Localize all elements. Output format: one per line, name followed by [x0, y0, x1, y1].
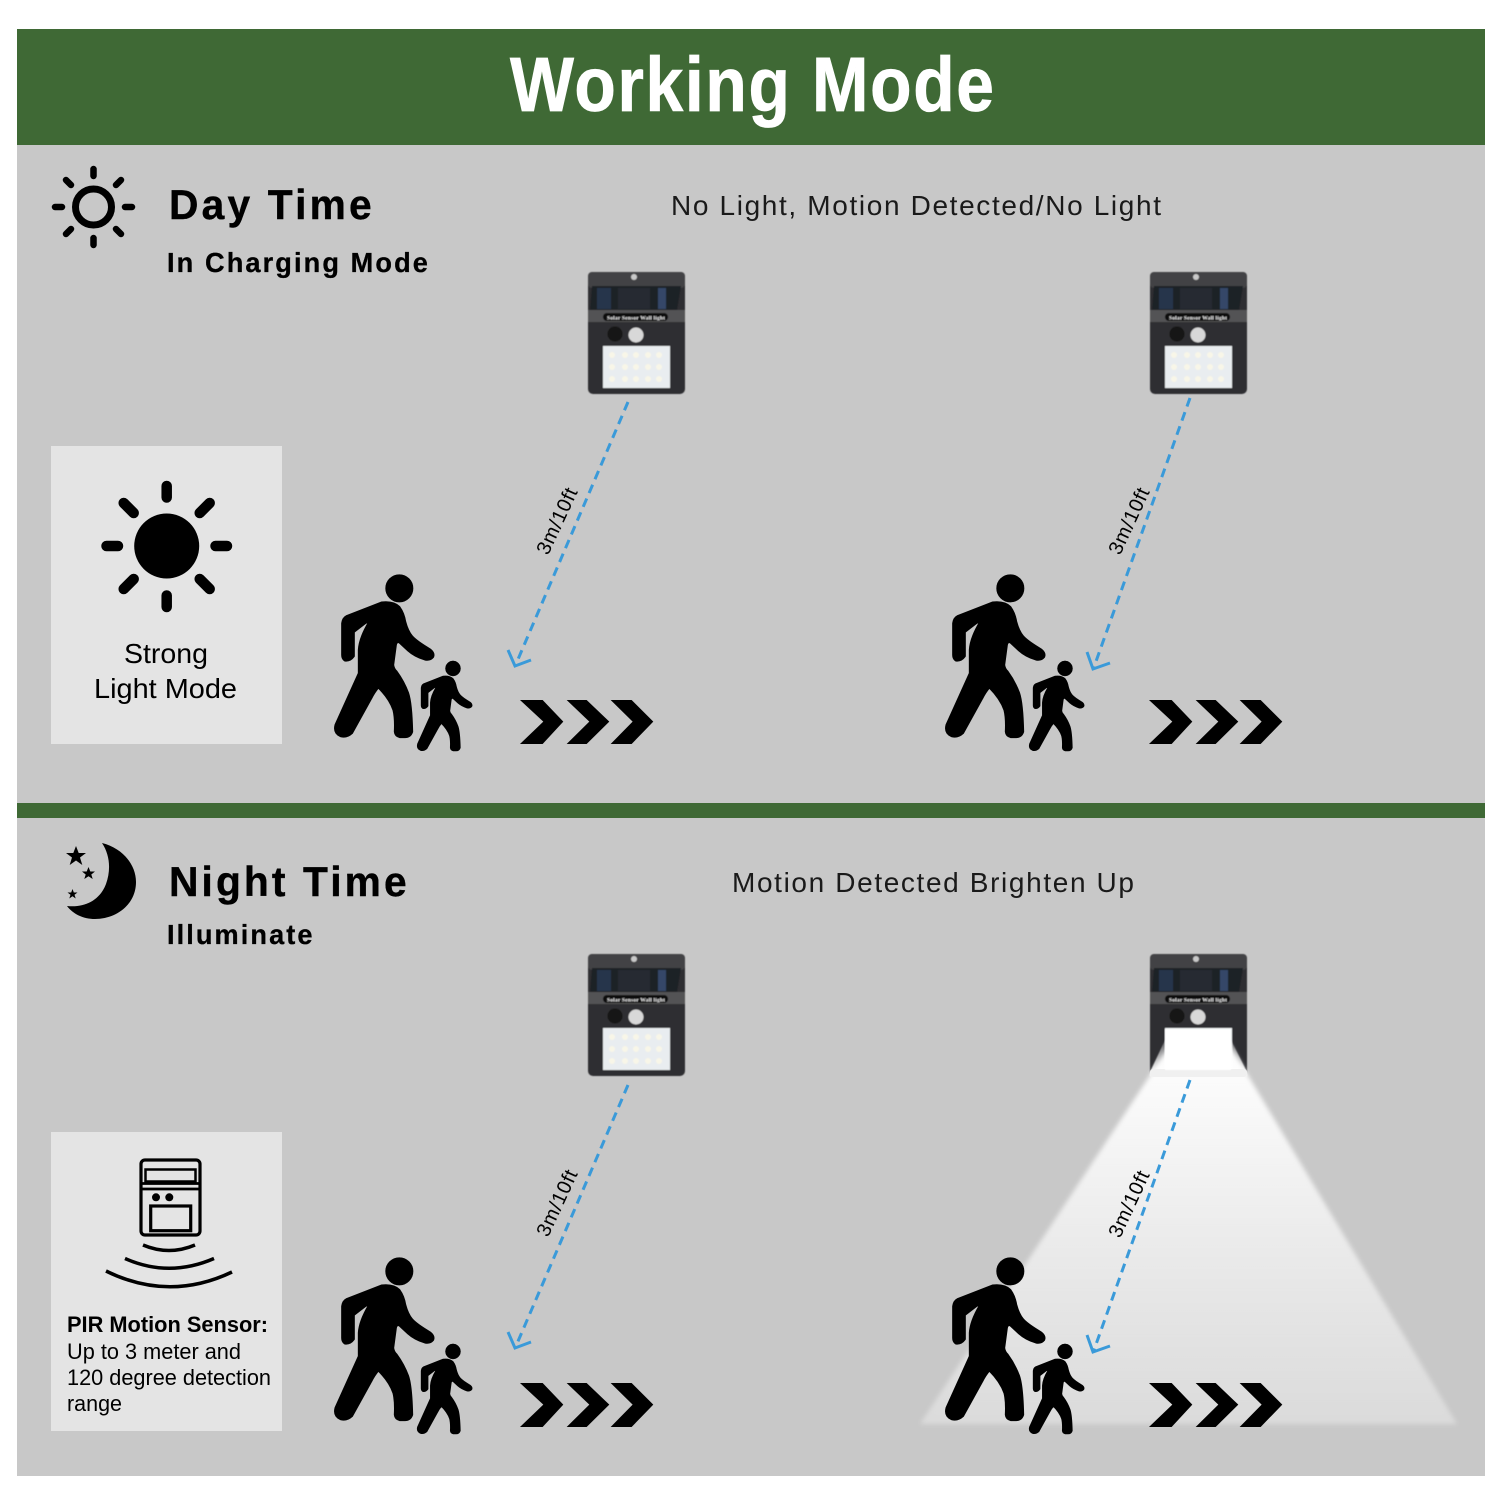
people: night left [336, 1258, 472, 1433]
lamp: day left: Solar Sensor Wall light [607, 316, 665, 322]
chevrons: day left [520, 700, 653, 744]
text: PIR description: Up to 3 meter and [67, 1339, 241, 1364]
lamp: night left: Solar Sensor Wall light [607, 998, 665, 1004]
people: night right [947, 1258, 1084, 1433]
distance label night left: 3m/10ft [533, 1166, 583, 1240]
distance label day left: 3m/10ft [533, 484, 583, 558]
header banner [17, 29, 1485, 145]
chevrons: night right [1149, 1383, 1282, 1427]
lamp: night left [588, 954, 685, 1076]
icon: outlined sun [55, 169, 132, 245]
arrow: distance night right [1087, 1080, 1190, 1352]
chevrons: night left [520, 1383, 653, 1427]
panel: strong light mode [51, 446, 282, 744]
subheading: illuminate: Illuminate [167, 919, 313, 950]
text: PIR description: 120 degree detection [67, 1365, 271, 1390]
arrow: distance day left [508, 402, 628, 666]
label: strong light mode: Strong [124, 638, 208, 669]
arrow: distance day right [1087, 398, 1190, 669]
people: day right [947, 575, 1084, 750]
chevrons: day right [1149, 700, 1282, 744]
lit lamp glare [1150, 1029, 1247, 1077]
text: PIR description [67, 1312, 271, 1416]
light cone [920, 1042, 1457, 1424]
subheading: charging mode: In Charging Mode [167, 247, 428, 278]
icon: solid sun [106, 486, 227, 607]
distance label night right: 3m/10ft [1105, 1167, 1155, 1241]
lamp: day left [588, 272, 685, 394]
text: PIR description: range [67, 1391, 122, 1416]
panel: PIR motion sensor [51, 1132, 282, 1431]
panel: strong light mode: Light Mode [94, 673, 237, 704]
divider bar [17, 803, 1485, 818]
lamp: day right: Solar Sensor Wall light [1169, 316, 1227, 322]
lamp: night right, lit: Solar Sensor Wall light [1169, 998, 1227, 1004]
panel: night time [17, 818, 1485, 1476]
heading: day time: Day Time [169, 181, 372, 228]
distance label day right: 3m/10ft [1105, 484, 1155, 558]
lamp: night right, lit [1150, 954, 1247, 1076]
title: Working Mode [510, 42, 994, 128]
caption: no light: No Light, Motion Detected/No Light [671, 190, 1161, 221]
panel: day time [17, 145, 1485, 803]
text: PIR description: PIR Motion Sensor: [67, 1312, 268, 1337]
people: day left [336, 575, 472, 750]
arrow: distance night left [508, 1085, 628, 1348]
caption: motion detected: Motion Detected Brighten Up [732, 867, 1134, 898]
icon: sensor with waves [106, 1160, 232, 1287]
heading: night time: Night Time [169, 858, 407, 905]
icon: moon and stars [66, 843, 136, 919]
lamp: day right [1150, 272, 1247, 394]
